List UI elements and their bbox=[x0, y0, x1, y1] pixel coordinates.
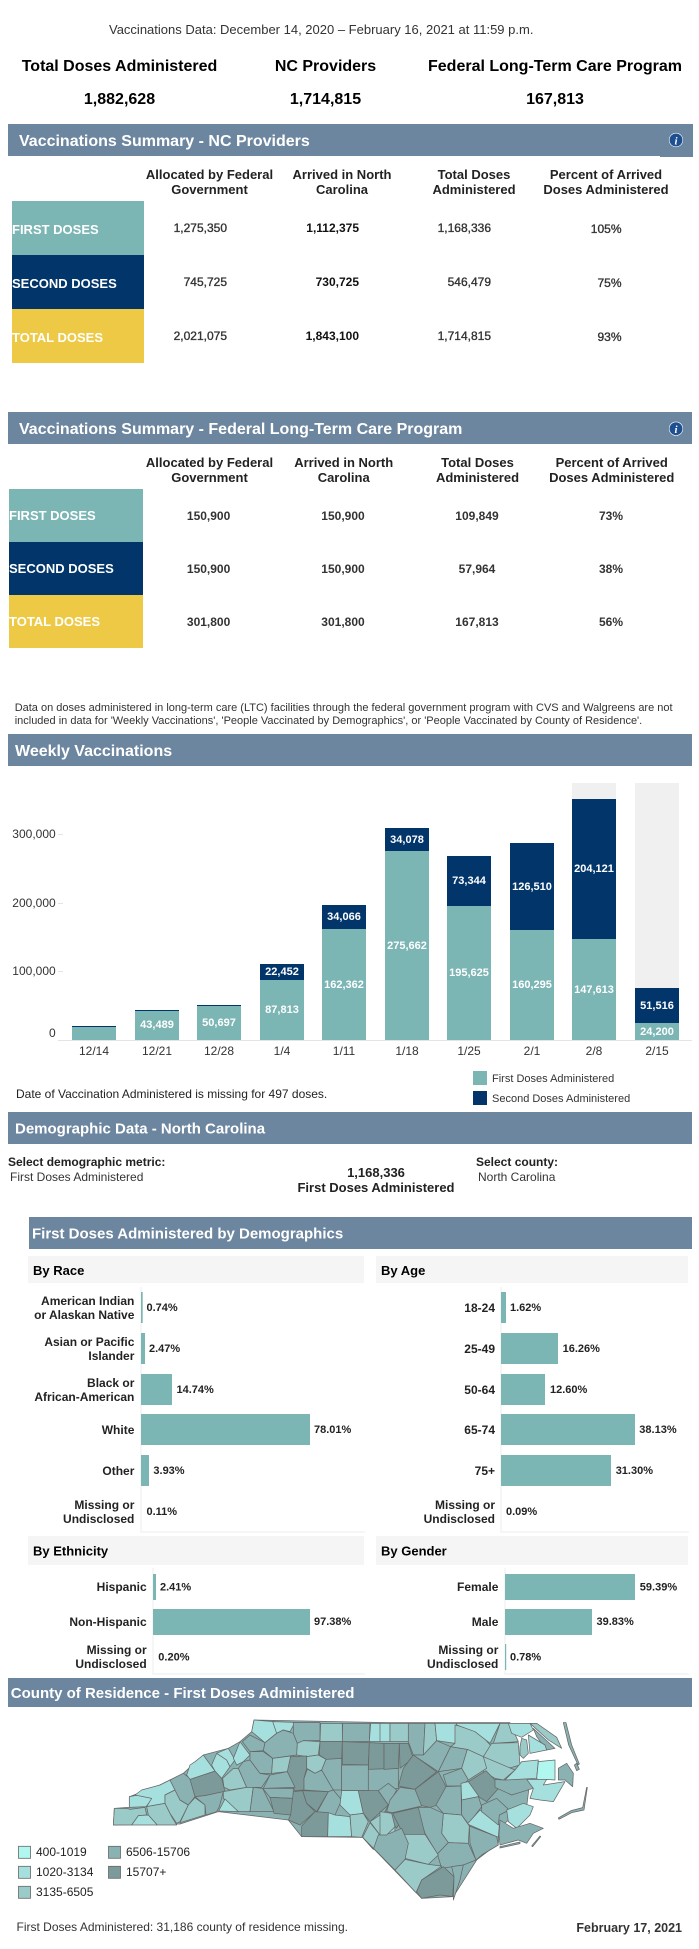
bar chart: weekly vaccinations: 22,452 bbox=[265, 966, 299, 978]
missing date note: Date of Vaccination Administered is missing for 497 doses. bbox=[16, 1087, 327, 1101]
table: Federal LTC summary: 150,900 bbox=[187, 562, 231, 576]
table: Federal LTC summary: Allocated by Federal bbox=[146, 455, 273, 470]
section header: Weekly Vaccinations: Weekly Vaccinations bbox=[15, 743, 172, 760]
panel: by gender: 0.78% bbox=[510, 1652, 541, 1664]
section header: Demographic Data bbox=[8, 1112, 692, 1144]
bar chart: weekly vaccinations bbox=[12, 783, 692, 1058]
bar chart: weekly vaccinations: 2/8 bbox=[586, 1044, 603, 1058]
panel: by age: 50-64 bbox=[464, 1383, 495, 1397]
headline statistics: 167,813 bbox=[526, 91, 584, 108]
panel: by gender: Undisclosed bbox=[427, 1657, 498, 1671]
panel: by ethnicity: Missing or bbox=[87, 1643, 147, 1657]
choropleth map: North Carolina counties bbox=[113, 1720, 587, 1900]
bar chart: weekly vaccinations: 160,295 bbox=[512, 979, 552, 991]
headline statistics: Federal Long-Term Care Program bbox=[428, 58, 682, 75]
table: Federal LTC summary: 150,900 bbox=[321, 509, 365, 523]
headline statistics: 1,882,628 bbox=[84, 91, 155, 108]
table: NC Providers summary: 2,021,075 bbox=[174, 329, 227, 343]
section header: NC Providers summary: Vaccinations Summary - NC Providers bbox=[19, 133, 310, 150]
bar chart: weekly vaccinations: 51,516 bbox=[640, 1000, 674, 1012]
panel: by age: 18-24 bbox=[464, 1301, 495, 1315]
panel: by ethnicity: 97.38% bbox=[314, 1616, 352, 1628]
panel: by age: 75+ bbox=[475, 1464, 495, 1478]
panel: by race: 3.93% bbox=[153, 1465, 185, 1477]
LTC data note bbox=[15, 702, 673, 727]
panel: by ethnicity bbox=[28, 1536, 365, 1674]
table: NC Providers summary: 730,725 bbox=[316, 275, 359, 289]
panel: by race: 0.74% bbox=[146, 1302, 178, 1314]
panel: by ethnicity: Hispanic bbox=[97, 1580, 147, 1594]
map legend: 6506-15706 bbox=[126, 1845, 190, 1859]
chart legend: Second Doses Administered bbox=[492, 1093, 630, 1105]
bar chart: weekly vaccinations: 126,510 bbox=[512, 881, 552, 893]
bar chart: weekly vaccinations: 1/4 bbox=[274, 1044, 291, 1058]
sub-section header: demographics bbox=[29, 1217, 692, 1249]
table: Federal LTC summary bbox=[9, 455, 674, 648]
map legend bbox=[18, 1845, 190, 1899]
demographic selectors and total: Select county: bbox=[476, 1155, 558, 1169]
panel: by age: 38.13% bbox=[639, 1424, 677, 1436]
table: Federal LTC summary: 150,900 bbox=[321, 562, 365, 576]
table: NC Providers summary: Administered bbox=[432, 182, 516, 197]
bar chart: weekly vaccinations: 300,000 bbox=[12, 827, 56, 841]
demographic selectors and total: North Carolina bbox=[478, 1170, 556, 1184]
section header: Federal LTC summary: Vaccinations Summary - Federal Long-Term Care Program bbox=[19, 421, 462, 438]
demographic selectors and total: First Doses Administered bbox=[297, 1180, 455, 1195]
table: Federal LTC summary: Percent of Arrived bbox=[556, 455, 668, 470]
bar chart: weekly vaccinations: 162,362 bbox=[324, 979, 364, 991]
table: NC Providers summary: Carolina bbox=[316, 182, 369, 197]
panel: by race: Undisclosed bbox=[63, 1512, 134, 1526]
panel: by race: American Indian bbox=[41, 1294, 134, 1308]
panel: by age bbox=[376, 1256, 689, 1532]
panel: by race: Other bbox=[102, 1464, 135, 1478]
section header: NC Providers summary bbox=[8, 124, 693, 157]
map legend: 1020-3134 bbox=[36, 1865, 94, 1879]
table: Federal LTC summary: 150,900 bbox=[187, 509, 231, 523]
table: NC Providers summary: 105% bbox=[591, 222, 622, 236]
date range line: Vaccinations Data: December 14, 2020 – February 16, 2021 at 11:59 p.m. bbox=[109, 22, 533, 37]
chart legend bbox=[473, 1071, 630, 1105]
section header: Weekly Vaccinations bbox=[8, 734, 692, 766]
panel: by age: 12.60% bbox=[550, 1384, 588, 1396]
table: NC Providers summary: Percent of Arrived bbox=[550, 167, 662, 182]
table: NC Providers summary: TOTAL DOSES bbox=[12, 330, 103, 345]
table: Federal LTC summary: Doses Administered bbox=[549, 470, 674, 485]
panel: by age: Undisclosed bbox=[424, 1512, 495, 1526]
table: NC Providers summary: Arrived in North bbox=[293, 167, 392, 182]
table: Federal LTC summary: Carolina bbox=[318, 470, 370, 485]
bar chart: weekly vaccinations: 87,813 bbox=[265, 1004, 299, 1016]
bar chart: weekly vaccinations: 12/28 bbox=[204, 1044, 234, 1058]
panel: by age: 16.26% bbox=[563, 1343, 600, 1355]
report date: February 17, 2021 bbox=[576, 1921, 682, 1935]
bar chart: weekly vaccinations: 50,697 bbox=[202, 1017, 236, 1029]
bar chart: weekly vaccinations: 1/18 bbox=[395, 1044, 419, 1058]
panel: by race: 0.11% bbox=[146, 1506, 177, 1518]
panel: by gender bbox=[376, 1536, 689, 1674]
table: NC Providers summary: SECOND DOSES bbox=[12, 276, 117, 291]
table: Federal LTC summary: 56% bbox=[599, 615, 623, 629]
headline statistics: NC Providers bbox=[275, 58, 376, 75]
table: NC Providers summary: Government bbox=[171, 182, 248, 197]
LTC data note: included in data for 'Weekly Vaccinations', 'People Vaccinated by Demographics', or 'People Vaccinated by County of Residence'. bbox=[15, 715, 642, 727]
panel: by race: 78.01% bbox=[314, 1424, 352, 1436]
panel: by race: Missing or bbox=[74, 1498, 135, 1512]
section header: Federal LTC summary bbox=[8, 412, 692, 444]
panel: by race: African-American bbox=[34, 1390, 134, 1404]
panel: by race: 14.74% bbox=[176, 1384, 214, 1396]
table: NC Providers summary: 1,714,815 bbox=[438, 329, 491, 343]
demographic selectors and total: First Doses Administered bbox=[10, 1170, 143, 1184]
panel: by race: White bbox=[102, 1423, 135, 1437]
table: Federal LTC summary: 301,800 bbox=[187, 615, 231, 629]
map legend: 15707+ bbox=[126, 1865, 166, 1879]
panel: by age: 25-49 bbox=[464, 1342, 495, 1356]
panel: by race bbox=[28, 1256, 365, 1532]
bar chart: weekly vaccinations: 275,662 bbox=[387, 940, 427, 952]
sub-section header: demographics: First Doses Administered by Demographics bbox=[32, 1226, 343, 1242]
panel: by race: Black or bbox=[87, 1376, 135, 1390]
bar chart: weekly vaccinations: 34,066 bbox=[327, 911, 361, 923]
map legend: 3135-6505 bbox=[36, 1885, 94, 1899]
table: Federal LTC summary: Total Doses bbox=[441, 455, 514, 470]
panel: by race: or Alaskan Native bbox=[34, 1308, 135, 1322]
bar chart: weekly vaccinations: 2/15 bbox=[645, 1044, 669, 1058]
panel: by age: By Age bbox=[381, 1263, 425, 1278]
table: NC Providers summary: Total Doses bbox=[438, 167, 510, 182]
section header: Federal LTC summary: i bbox=[674, 424, 678, 436]
table: NC Providers summary: 745,725 bbox=[184, 275, 227, 289]
panel: by ethnicity: 2.41% bbox=[160, 1582, 191, 1594]
bar chart: weekly vaccinations: 1/11 bbox=[333, 1044, 356, 1058]
table: NC Providers summary: 75% bbox=[597, 276, 622, 290]
panel: by age: 1.62% bbox=[510, 1302, 541, 1314]
headline statistics: 1,714,815 bbox=[290, 91, 361, 108]
panel: by age: 0.09% bbox=[506, 1506, 537, 1518]
demographic selectors and total bbox=[8, 1155, 558, 1195]
panel: by race: Asian or Pacific bbox=[44, 1335, 135, 1349]
panel: by gender: Male bbox=[472, 1615, 499, 1629]
LTC data note: Data on doses administered in long-term care (LTC) facilities through the federal government program with CVS and Walgreens are not bbox=[15, 702, 673, 714]
table: NC Providers summary bbox=[12, 167, 669, 363]
table: Federal LTC summary: Government bbox=[171, 470, 248, 485]
panel: by race: By Race bbox=[33, 1263, 84, 1278]
bar chart: weekly vaccinations: 73,344 bbox=[452, 875, 487, 887]
panel: by age: 65-74 bbox=[464, 1423, 495, 1437]
section header: Demographic Data: Demographic Data - North Carolina bbox=[15, 1120, 266, 1138]
panel: by gender: By Gender bbox=[381, 1544, 447, 1558]
bar chart: weekly vaccinations: 204,121 bbox=[574, 863, 614, 875]
bar chart: weekly vaccinations: 0 bbox=[49, 1026, 56, 1040]
headline statistics bbox=[22, 58, 682, 108]
section header: NC Providers summary: i bbox=[674, 136, 678, 148]
table: Federal LTC summary: 38% bbox=[599, 562, 623, 576]
table: NC Providers summary: 1,843,100 bbox=[306, 329, 359, 343]
panel: by age: 31.30% bbox=[616, 1465, 653, 1477]
table: NC Providers summary: 1,168,336 bbox=[438, 221, 491, 235]
panel: by gender: Female bbox=[457, 1580, 499, 1594]
bar chart: weekly vaccinations: 34,078 bbox=[390, 834, 424, 846]
panel: by gender: 39.83% bbox=[596, 1616, 634, 1628]
bar chart: weekly vaccinations: 100,000 bbox=[12, 964, 56, 978]
table: NC Providers summary: Allocated by Federal bbox=[146, 167, 273, 182]
table: NC Providers summary: 1,275,350 bbox=[174, 221, 227, 235]
panel: by race: Islander bbox=[88, 1349, 135, 1363]
table: Federal LTC summary: 57,964 bbox=[459, 562, 496, 576]
map legend: 400-1019 bbox=[36, 1845, 87, 1859]
section header: county of residence: County of Residence - First Doses Administered bbox=[11, 1685, 354, 1702]
table: NC Providers summary: 546,479 bbox=[448, 275, 491, 289]
chart legend: First Doses Administered bbox=[492, 1073, 614, 1085]
county residence note: First Doses Administered: 31,186 county of residence missing. bbox=[16, 1920, 348, 1934]
panel: by ethnicity: By Ethnicity bbox=[33, 1544, 109, 1558]
table: Federal LTC summary: TOTAL DOSES bbox=[9, 614, 100, 629]
panel: by age: Missing or bbox=[435, 1498, 495, 1512]
table: NC Providers summary: 1,112,375 bbox=[306, 221, 359, 235]
bar chart: weekly vaccinations: 43,489 bbox=[140, 1019, 174, 1031]
demographic selectors and total: Select demographic metric: bbox=[8, 1155, 165, 1169]
demographic selectors and total: 1,168,336 bbox=[347, 1165, 405, 1180]
panel: by ethnicity: Non-Hispanic bbox=[69, 1615, 147, 1629]
table: NC Providers summary: Doses Administered bbox=[543, 182, 669, 197]
bar chart: weekly vaccinations: 2/1 bbox=[524, 1044, 541, 1058]
table: Federal LTC summary: Administered bbox=[436, 470, 519, 485]
panel: by ethnicity: Undisclosed bbox=[75, 1657, 147, 1671]
table: Federal LTC summary: 167,813 bbox=[455, 615, 499, 629]
panel: by gender: Missing or bbox=[438, 1643, 499, 1657]
bar chart: weekly vaccinations: 147,613 bbox=[574, 984, 614, 996]
table: Federal LTC summary: 301,800 bbox=[321, 615, 365, 629]
table: NC Providers summary: 93% bbox=[597, 330, 622, 344]
panel: by ethnicity: 0.20% bbox=[158, 1652, 190, 1664]
table: Federal LTC summary: SECOND DOSES bbox=[9, 561, 114, 576]
headline statistics: Total Doses Administered bbox=[22, 58, 217, 75]
table: Federal LTC summary: FIRST DOSES bbox=[9, 508, 96, 523]
table: Federal LTC summary: 109,849 bbox=[455, 509, 499, 523]
section header: county of residence bbox=[8, 1678, 692, 1707]
table: Federal LTC summary: Arrived in North bbox=[294, 455, 393, 470]
bar chart: weekly vaccinations: 12/14 bbox=[79, 1044, 109, 1058]
bar chart: weekly vaccinations: 1/25 bbox=[457, 1044, 481, 1058]
table: Federal LTC summary: 73% bbox=[599, 509, 623, 523]
bar chart: weekly vaccinations: 12/21 bbox=[142, 1044, 172, 1058]
table: NC Providers summary: FIRST DOSES bbox=[12, 222, 99, 237]
bar chart: weekly vaccinations: 195,625 bbox=[449, 967, 489, 979]
bar chart: weekly vaccinations: 200,000 bbox=[12, 896, 56, 910]
panel: by gender: 59.39% bbox=[640, 1582, 677, 1594]
panel: by race: 2.47% bbox=[149, 1343, 180, 1355]
bar chart: weekly vaccinations: 24,200 bbox=[640, 1026, 674, 1038]
